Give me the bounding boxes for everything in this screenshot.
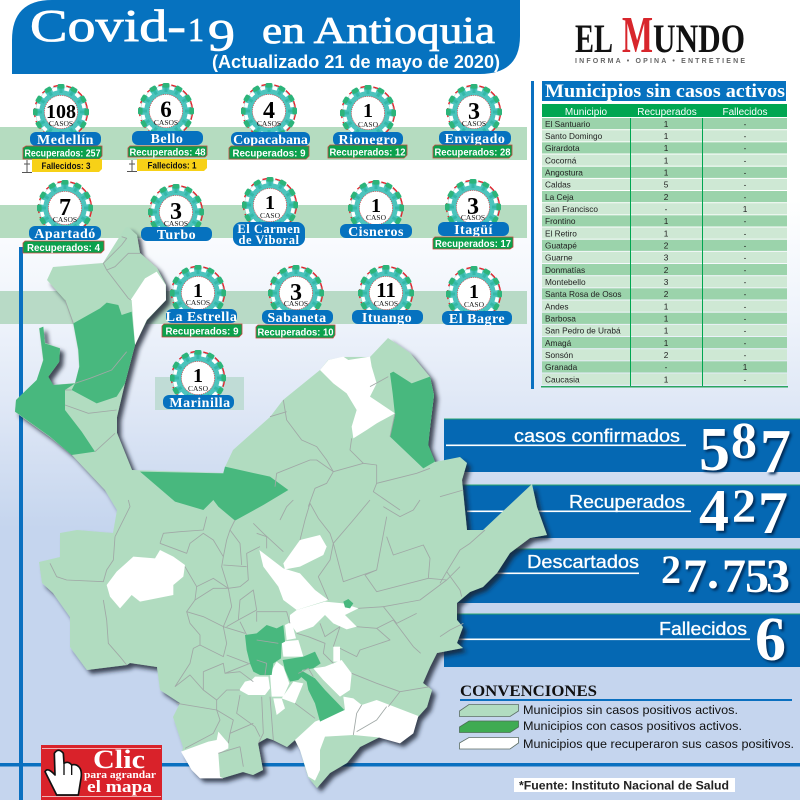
badge: Envigado: 3: [468, 99, 480, 125]
stat: descartados: Descartados: [527, 552, 639, 572]
legend heading: CONVENCIONES: [460, 683, 597, 700]
stat: recuperados: 4: [699, 478, 729, 544]
badge: Turbo: CASOS: [164, 219, 188, 228]
badge: Bello: Fallecidos: 1: [148, 160, 196, 170]
badge: Medellín: Medellín: [37, 133, 94, 148]
stat: descartados: 7: [683, 550, 707, 603]
badge: Cisneros: Cisneros: [348, 225, 404, 240]
badge: Cisneros: CASO: [366, 213, 387, 222]
badge: La Estrella: La Estrella: [166, 310, 237, 325]
table text: 1: [664, 374, 669, 384]
badge: El Bagre: CASO: [464, 300, 485, 309]
badge: La Estrella: Recuperados: 9: [166, 326, 239, 338]
table text: San Francisco: [545, 204, 598, 214]
button: clic para agrandar el mapa: para agrandar: [84, 770, 157, 781]
stat: descartados: 5: [745, 550, 769, 603]
badge: Sabaneta: Sabaneta: [267, 311, 327, 326]
table text: -: [744, 228, 747, 238]
table text: Montebello: [545, 277, 586, 287]
logo: El Mundo: EL: [575, 16, 613, 61]
badge: Sabaneta: 3: [290, 280, 302, 306]
table vertical blue rule: [531, 81, 534, 389]
table text: Cocorná: [545, 155, 577, 165]
table text: Guatapé: [545, 240, 577, 250]
stat: fallecidos: [659, 606, 786, 674]
map of Antioquia: [15, 227, 547, 788]
badge: Medellín: Fallecidos: 3: [42, 161, 90, 171]
table text: 1: [664, 338, 669, 348]
badge: Medellín: CASOS: [49, 119, 73, 128]
badge: Copacabana: Copacabana: [233, 133, 308, 148]
badge: Apartadó: Recuperados: 4: [27, 243, 100, 254]
badge: El Bagre: 1: [469, 281, 479, 303]
table header: [542, 104, 787, 118]
badge: Itagüí: 3: [467, 194, 479, 220]
legend rule: [460, 699, 792, 701]
table text: 1: [664, 228, 669, 238]
badge: Copacabana: Recuperados: 9: [232, 148, 306, 160]
badge: Envigado: Envigado: [445, 132, 505, 147]
badge: Cisneros: 1: [371, 195, 381, 217]
stat: descartados: 7: [722, 550, 746, 603]
badge: Turbo: [141, 184, 212, 243]
green band row 1: [0, 127, 527, 160]
update date: (Actualizado 21 de mayo de 2020): [212, 52, 500, 72]
table text: -: [744, 192, 747, 202]
stat: descartados: 2: [661, 547, 681, 592]
map base shape: [15, 227, 547, 788]
table text: 2: [664, 350, 669, 360]
table text: -: [744, 143, 747, 153]
badge: La Estrella: [162, 265, 242, 338]
badge: Apartadó: [23, 180, 104, 254]
stat: descartados: .: [707, 546, 719, 599]
table text: Barbosa: [545, 314, 576, 324]
table text: 1: [664, 301, 669, 311]
badge: Ituango: 11: [376, 278, 396, 302]
table text: Andes: [545, 301, 569, 311]
badge: Envigado: Recuperados: 28: [434, 148, 511, 158]
table text: -: [744, 119, 747, 129]
stat: casos confirmados: 7: [760, 418, 791, 486]
table text: Caldas: [545, 180, 571, 190]
badge: Itagüí: Recuperados: 17: [435, 239, 511, 250]
table text: Amagá: [545, 338, 572, 348]
table text: 1: [664, 119, 669, 129]
table rows: [541, 118, 788, 388]
logo: El Mundo: M: [622, 7, 653, 64]
badge: El Carmen de Viboral: [233, 177, 305, 247]
stat bands: [444, 418, 800, 667]
badge: Copacabana: 4: [263, 98, 275, 124]
table text: 1: [664, 143, 669, 153]
title: 9: [208, 11, 235, 60]
badge: La Estrella: 1: [193, 280, 203, 302]
stat: casos confirmados: 5: [699, 416, 730, 484]
table text: La Ceja: [545, 192, 574, 202]
badge: Medellín: 108: [46, 101, 76, 123]
table text: 1: [664, 216, 669, 226]
table header: Fallecidos: [722, 107, 768, 118]
table text: Donmatías: [545, 265, 585, 275]
badge: Marinilla: [163, 350, 234, 411]
badge: Rionegro: Rionegro: [339, 133, 397, 148]
green band Marinilla: [155, 377, 244, 410]
green band row 3: [0, 291, 527, 324]
bottom horizontal blue rule: [0, 763, 800, 766]
badge: Copacabana: CASOS: [257, 119, 281, 128]
panel: municipios sin casos activos: [541, 81, 788, 388]
badge: La Estrella: CASOS: [186, 298, 210, 307]
table text: -: [744, 155, 747, 165]
table text: -: [665, 204, 668, 214]
badge: Envigado: [433, 84, 512, 158]
badge: Sabaneta: CASOS: [284, 299, 308, 308]
stat: recuperados: 2: [732, 480, 756, 533]
table text: [545, 119, 748, 384]
badge: Rionegro: CASO: [358, 120, 379, 129]
table text: -: [744, 168, 747, 178]
table text: 1: [664, 326, 669, 336]
table text: -: [744, 326, 747, 336]
green band row 2: [0, 205, 527, 238]
title location: en Antioquia: [262, 10, 495, 52]
badge: Bello: CASOS: [154, 118, 178, 127]
eastern municipalities: [440, 490, 485, 637]
badge: Apartadó: Apartadó: [34, 227, 96, 242]
stat: descartados: [527, 546, 790, 603]
table text: -: [744, 216, 747, 226]
badge: Rionegro: 1: [363, 100, 373, 122]
badge: Itagüí: Itagüí: [454, 223, 493, 238]
table text: -: [744, 374, 747, 384]
stat: casos confirmados: 8: [731, 413, 757, 470]
badge: El Bagre: [442, 266, 512, 327]
table text: 1: [664, 131, 669, 141]
badge: Turbo: 3: [170, 199, 182, 225]
table text: 2: [664, 240, 669, 250]
legend: convenciones: [460, 683, 794, 751]
table header: Municipio: [565, 107, 608, 118]
badge: Marinilla: Marinilla: [169, 396, 231, 411]
table text: Sonsón: [545, 350, 574, 360]
header banner: [12, 0, 520, 74]
table text: Santo Domingo: [545, 131, 603, 141]
badge: Ituango: [352, 265, 423, 326]
badge: Medellín: [22, 84, 102, 172]
badge: Bello: 6: [160, 97, 172, 122]
table text: -: [744, 131, 747, 141]
icon: pointing hand: [45, 750, 81, 795]
logo: El Mundo: [575, 7, 745, 65]
left vertical blue rule: [19, 247, 23, 800]
central and southern municipalities: [50, 500, 460, 781]
badge: El Bagre: El Bagre: [449, 312, 505, 327]
badge: Itagüí: CASOS: [461, 213, 485, 222]
badge: Marinilla: 1: [193, 365, 203, 387]
title: 1: [188, 12, 204, 49]
table text: -: [744, 253, 747, 263]
table text: 1: [743, 362, 748, 372]
stat: recuperados: 7: [758, 480, 788, 546]
table text: 1: [664, 314, 669, 324]
badge: Sabaneta: Recuperados: 10: [258, 328, 334, 338]
button: clic para agrandar el mapa: [41, 745, 162, 800]
legend item: sin casos: Municipios sin casos positivos activos.: [523, 703, 738, 717]
badge: Medellín: Recuperados: 257: [24, 148, 101, 160]
badge: Copacabana: [229, 83, 310, 160]
table text: -: [744, 180, 747, 190]
table text: Caucasia: [545, 374, 580, 384]
legend item: con casos: Municipios con casos positivos activos.: [523, 719, 742, 733]
stat: recuperados: Recuperados: [569, 492, 685, 512]
badge: Ituango: Ituango: [362, 311, 412, 326]
stat: recuperados: [569, 478, 788, 546]
table text: 3: [664, 277, 669, 287]
stat: descartados: 3: [766, 550, 790, 603]
badge: Rionegro: [328, 85, 407, 158]
table text: Santa Rosa de Osos: [545, 289, 622, 299]
table text: Granada: [545, 362, 578, 372]
table text: El Santuario: [545, 119, 591, 129]
badge: Turbo: Turbo: [157, 228, 196, 243]
table text: 2: [664, 289, 669, 299]
badge: Bello: Recuperados: 48: [130, 148, 206, 158]
badge: El Carmen de Viboral: 1: [265, 192, 275, 214]
table text: -: [744, 301, 747, 311]
badge: Rionegro: Recuperados: 12: [330, 148, 406, 158]
table text: Angostura: [545, 168, 583, 178]
table text: -: [744, 277, 747, 287]
table text: 1: [664, 168, 669, 178]
badge: Marinilla: CASO: [188, 384, 209, 393]
logo: El Mundo: INFORMA • OPINA • ENTRETIENE: [575, 58, 745, 65]
table title: Municipios sin casos activos: [545, 81, 785, 102]
table text: Guarne: [545, 253, 573, 263]
table text: 5: [664, 180, 669, 190]
table text: -: [744, 240, 747, 250]
badge: Apartadó: CASOS: [53, 215, 77, 224]
stat: fallecidos: 6: [755, 606, 786, 674]
table text: 2: [664, 265, 669, 275]
legend item: recuperados: Municipios que recuperaron sus casos positivos.: [523, 737, 794, 751]
badge: Cisneros: [340, 180, 412, 240]
button: clic para agrandar el mapa: Clic: [93, 745, 145, 774]
badge: Apartadó: 7: [59, 195, 71, 221]
stat: fallecidos: Fallecidos: [659, 619, 747, 639]
table text: El Retiro: [545, 228, 577, 238]
table text: Frontino: [545, 216, 576, 226]
badge: Ituango: CASOS: [374, 299, 398, 308]
badge: Envigado: CASOS: [462, 119, 486, 128]
table text: 3: [664, 253, 669, 263]
table text: -: [744, 289, 747, 299]
badge: Bello: Bello: [151, 132, 183, 147]
badge: El Carmen de Viboral: de Viboral: [239, 233, 299, 247]
table text: 2: [664, 192, 669, 202]
stat: casos confirmados: [514, 413, 791, 486]
table text: -: [744, 350, 747, 360]
table text: Girardota: [545, 143, 580, 153]
table header: Recuperados: [637, 107, 697, 118]
badge: Sabaneta: [256, 265, 335, 338]
badge: El Carmen de Viboral: CASO: [260, 211, 281, 220]
table text: 1: [743, 204, 748, 214]
table text: -: [744, 314, 747, 324]
table text: -: [665, 362, 668, 372]
table text: -: [744, 338, 747, 348]
table text: San Pedro de Urabá: [545, 326, 621, 336]
source note: *Fuente: Instituto Nacional de Salud: [519, 780, 729, 792]
badge: El Carmen de Viboral: El Carmen: [237, 222, 301, 236]
badge: Itagüí: [433, 179, 513, 250]
Urabá municipalities: [15, 237, 435, 521]
logo: El Mundo: UNDO: [653, 16, 745, 61]
title: Covid-: [30, 0, 186, 51]
stat: casos confirmados: casos confirmados: [514, 426, 680, 446]
table text: 1: [664, 155, 669, 165]
button: clic para agrandar el mapa: el mapa: [87, 777, 153, 796]
badge: Bello: [127, 83, 207, 172]
table text: -: [744, 265, 747, 275]
